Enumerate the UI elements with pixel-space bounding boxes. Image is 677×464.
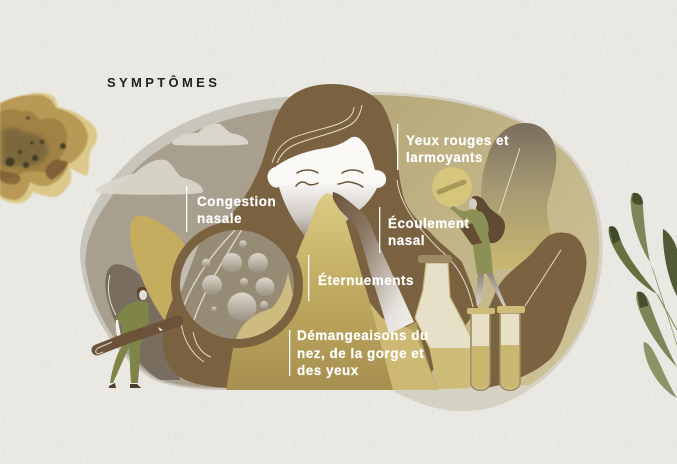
magnifier handle — [96, 321, 178, 354]
label: démangeaisons: Démangeaisons du — [297, 328, 429, 343]
label: démangeaisons: des yeux — [297, 363, 359, 378]
label: écoulement nasal: Écoulement — [388, 216, 470, 231]
small man — [109, 287, 149, 388]
right khaki circle — [370, 95, 599, 390]
label: éternuements — [308, 255, 414, 301]
upper right gradient leaf — [481, 123, 560, 270]
label: yeux rouges et larmoyants: larmoyants — [406, 150, 483, 165]
tissue — [226, 193, 438, 390]
left outer sky blob — [80, 96, 320, 390]
hair — [163, 84, 478, 388]
bubbles — [202, 240, 274, 322]
label: congestion nasale: nasale — [197, 211, 242, 226]
label: yeux rouges et larmoyants — [397, 124, 509, 170]
label: démangeaisons — [289, 328, 429, 378]
title: SYMPTÔMES — [107, 75, 220, 90]
label: congestion nasale — [186, 186, 276, 232]
label: démangeaisons: nez, de la gorge et — [297, 346, 424, 361]
brown right leaf — [470, 232, 586, 390]
clouds — [95, 123, 248, 195]
magnifying glass — [170, 220, 305, 350]
watercolor leaves — [609, 193, 677, 398]
label: yeux rouges et larmoyants: Yeux rouges et — [406, 133, 509, 148]
label: congestion nasale: Congestion — [197, 194, 276, 209]
label: écoulement nasal: nasal — [388, 233, 425, 248]
lighter tissue fold — [370, 303, 438, 390]
hair strands — [181, 105, 473, 362]
central illustration — [80, 84, 603, 411]
pill — [432, 167, 472, 207]
flask — [415, 255, 471, 389]
hand and sleeve band — [333, 192, 414, 334]
lens — [180, 230, 294, 339]
yellow left leaf — [130, 216, 200, 335]
right pale outer circle — [370, 92, 603, 411]
small woman — [450, 196, 506, 306]
label: éternuements: Éternuements — [318, 273, 414, 288]
face — [267, 137, 386, 236]
dark left leaf — [105, 264, 180, 380]
label: écoulement nasal — [379, 207, 470, 253]
watercolor flower — [0, 93, 97, 203]
left inner sky blob — [86, 106, 320, 388]
leaf veins — [499, 148, 561, 306]
test tubes — [467, 306, 525, 390]
